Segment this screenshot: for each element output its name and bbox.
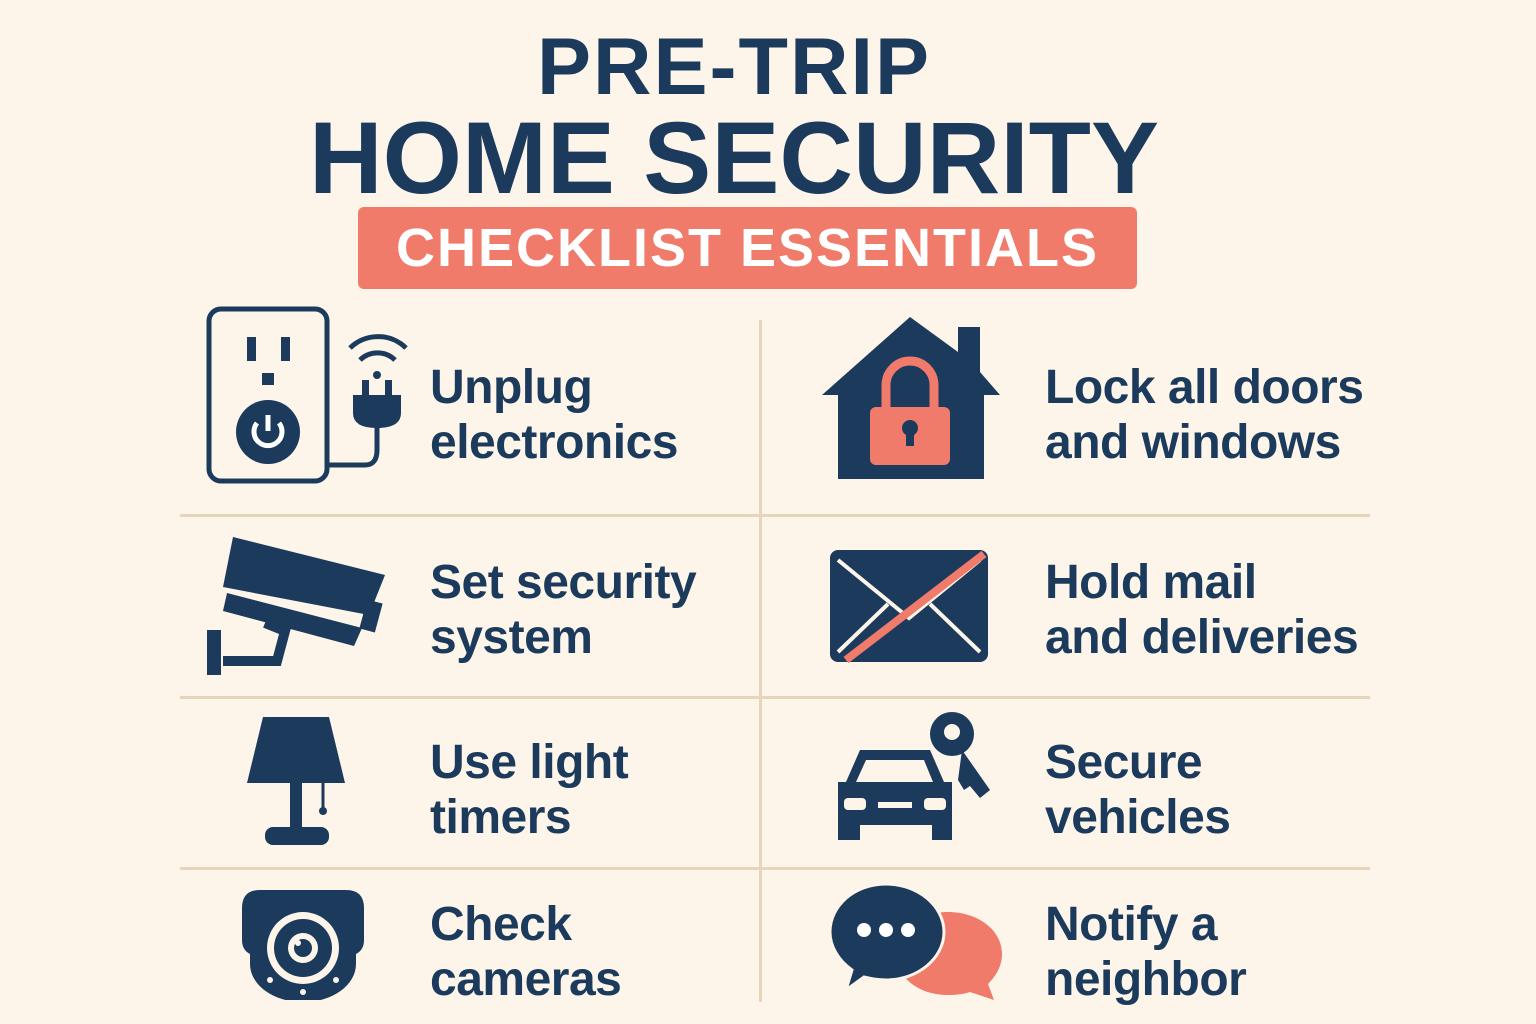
text: light timers: timers — [430, 791, 571, 844]
text: check cameras: Check — [430, 898, 572, 951]
banner: checklist essentials: CHECKLIST ESSENTIALS — [396, 218, 1099, 278]
text: notify neighbor: neighbor — [1045, 953, 1246, 1006]
text: check cameras: cameras — [430, 953, 621, 1006]
text: unplug electronics: electronics — [430, 416, 678, 469]
text: light timers: Use light — [430, 736, 628, 789]
icon: outlet plug — [206, 306, 408, 484]
text: hold mail: Hold mail — [1045, 556, 1257, 609]
text: lock doors: and windows — [1045, 416, 1341, 469]
icon: no mail envelope — [830, 550, 988, 663]
text: secure vehicles — [1045, 736, 1230, 844]
text: notify neighbor: Notify a — [1045, 898, 1217, 951]
text: secure vehicles: vehicles — [1045, 791, 1230, 844]
icon: dome camera — [242, 890, 364, 1000]
icon: lamp — [247, 717, 345, 845]
text: unplug electronics — [430, 361, 678, 469]
text: secure vehicles: Secure — [1045, 736, 1202, 789]
text: hold mail: and deliveries — [1045, 611, 1358, 664]
text: lock doors — [1045, 361, 1363, 469]
text: notify neighbor — [1045, 898, 1246, 1006]
title: PRE-TRIP — [537, 22, 931, 112]
text: set security: system — [430, 611, 592, 664]
text: set security — [430, 556, 696, 664]
icon: security camera — [207, 537, 385, 675]
title: HOME SECURITY — [309, 101, 1159, 215]
title — [309, 22, 1159, 215]
icon: chat bubbles — [832, 886, 1002, 1000]
text: hold mail — [1045, 556, 1358, 664]
text: unplug electronics: Unplug — [430, 361, 592, 414]
banner: checklist essentials — [358, 207, 1137, 289]
icon: car and key — [838, 712, 990, 840]
text: light timers — [430, 736, 628, 844]
text: set security: Set security — [430, 556, 696, 609]
text: lock doors: Lock all doors — [1045, 361, 1363, 414]
icon: house lock — [822, 317, 1000, 479]
text: check cameras — [430, 898, 621, 1006]
